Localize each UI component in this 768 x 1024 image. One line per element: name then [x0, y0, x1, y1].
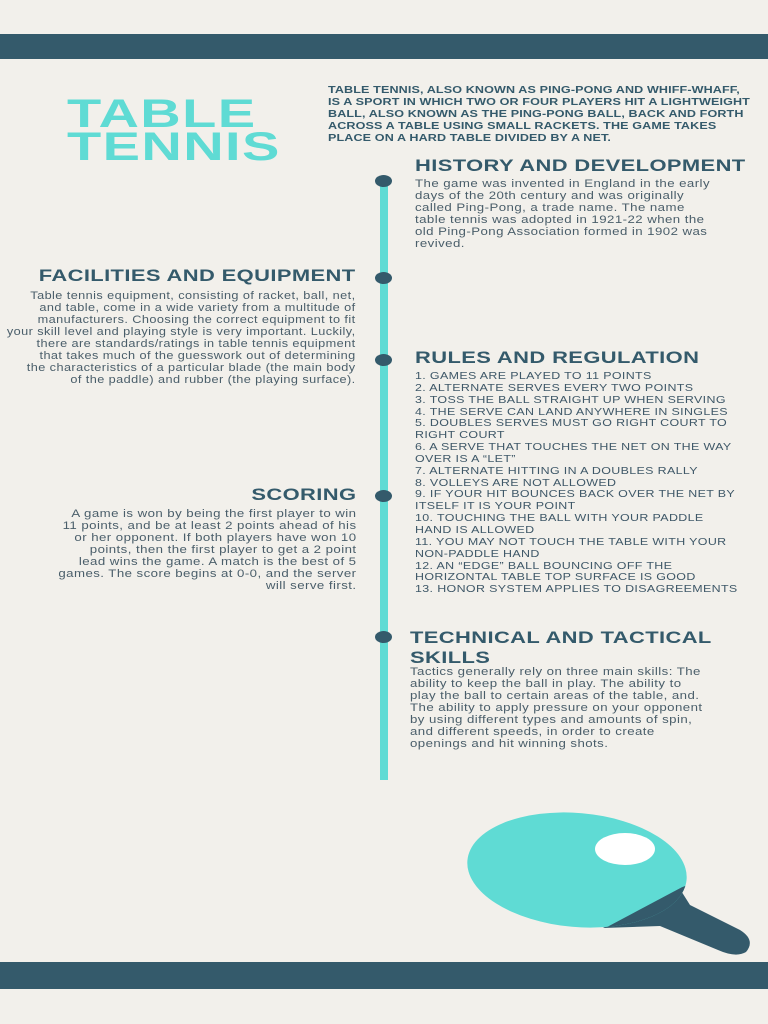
intro text	[328, 85, 750, 144]
facilities text: there are standards/ratings in table tennis equipment	[37, 338, 356, 350]
technical text: The ability to apply pressure on your opponent	[410, 702, 702, 714]
rules list: 6. A SERVE THAT TOUCHES THE NET ON THE WAY	[415, 442, 732, 453]
facilities text: Table tennis equipment, consisting of racket, ball, net,	[31, 290, 356, 302]
rules list: NON-PADDLE HAND	[415, 549, 540, 560]
timeline line	[380, 180, 388, 780]
rules heading: RULES AND REGULATION	[415, 348, 699, 367]
title: TENNIS	[67, 125, 281, 169]
scoring text: A game is won by being the first player to win	[71, 508, 356, 520]
rules list: 4. THE SERVE CAN LAND ANYWHERE IN SINGLES	[415, 407, 728, 418]
facilities text: that takes much of the guesswork out of determining	[40, 350, 356, 362]
facilities text: of the paddle) and rubber (the playing surface).	[71, 374, 356, 386]
title	[67, 92, 281, 169]
technical text: by using different types and amounts of spin,	[410, 714, 692, 726]
rules list: HAND IS ALLOWED	[415, 525, 534, 536]
history text: old Ping-Pong Association formed in 1902 was	[415, 226, 707, 238]
rules list: 12. AN “EDGE” BALL BOUNCING OFF THE	[415, 560, 672, 572]
facilities text: and table, come in a wide variety from a multitude of	[40, 302, 356, 314]
technical heading: TECHNICAL AND TACTICAL	[410, 628, 712, 647]
icon: paddle	[467, 812, 750, 955]
history text: The game was invented in England in the early	[415, 178, 710, 190]
rules list: 2. ALTERNATE SERVES EVERY TWO POINTS	[415, 383, 693, 394]
technical text: play the ball to certain areas of the table, and.	[410, 690, 699, 702]
scoring text: games. The score begins at 0-0, and the server	[58, 568, 356, 580]
history text: called Ping-Pong, a trade name. The name	[415, 202, 685, 214]
history text: revived.	[415, 238, 465, 250]
facilities text: the characteristics of a particular blade (the main body	[27, 362, 356, 374]
history text: table tennis was adopted in 1921-22 when the	[415, 214, 704, 226]
intro text: TABLE TENNIS, ALSO KNOWN AS PING-PONG AND WHIFF-WHAFF,	[328, 85, 740, 96]
intro text: BALL, ALSO KNOWN AS THE PING-PONG BALL, BACK AND FORTH	[328, 109, 744, 120]
intro text: IS A SPORT IN WHICH TWO OR FOUR PLAYERS HIT A LIGHTWEIGHT	[328, 97, 750, 108]
title: TABLE	[67, 92, 257, 136]
rules list: 5. DOUBLES SERVES MUST GO RIGHT COURT TO	[415, 418, 727, 429]
rules list: 8. VOLLEYS ARE NOT ALLOWED	[415, 478, 616, 489]
facilities heading: FACILITIES AND EQUIPMENT	[39, 266, 356, 285]
rules list: OVER IS A “LET”	[415, 454, 516, 465]
scoring text: lead wins the game. A match is the best of 5	[78, 556, 356, 568]
history text	[415, 178, 710, 250]
scoring text: or her opponent. If both players have won 10	[74, 532, 356, 544]
rules list	[415, 371, 738, 595]
history heading: HISTORY AND DEVELOPMENT	[415, 156, 746, 175]
rules list: 9. IF YOUR HIT BOUNCES BACK OVER THE NET BY	[415, 489, 735, 500]
technical heading: SKILLS	[410, 648, 490, 667]
scoring heading: SCORING	[251, 485, 356, 504]
scoring text: will serve first.	[265, 580, 356, 592]
facilities text: your skill level and playing style is very important. Luckily,	[7, 326, 356, 338]
rules list: 10. TOUCHING THE BALL WITH YOUR PADDLE	[415, 513, 704, 524]
rules list: HORIZONTAL TABLE TOP SURFACE IS GOOD	[415, 572, 696, 583]
rules list: 7. ALTERNATE HITTING IN A DOUBLES RALLY	[415, 466, 698, 477]
facilities text: manufacturers. Choosing the correct equipment to fit	[38, 314, 356, 326]
rules list: 11. YOU MAY NOT TOUCH THE TABLE WITH YOUR	[415, 537, 727, 548]
top bar	[0, 34, 768, 59]
scoring text: 11 points, and be at least 2 points ahead of his	[62, 520, 356, 532]
technical text: openings and hit winning shots.	[410, 738, 608, 750]
rules list: ITSELF IT IS YOUR POINT	[415, 501, 576, 512]
technical text: ability to keep the ball in play. The ability to	[410, 678, 682, 690]
scoring text	[58, 508, 356, 592]
technical text	[410, 666, 702, 750]
technical heading	[410, 628, 712, 667]
scoring text: points, then the first player to get a 2 point	[89, 544, 356, 556]
intro text: PLACE ON A HARD TABLE DIVIDED BY A NET.	[328, 133, 611, 144]
history text: days of the 20th century and was originally	[415, 190, 684, 202]
intro text: ACROSS A TABLE USING SMALL RACKETS. THE GAME TAKES	[328, 121, 716, 132]
facilities text	[7, 290, 356, 386]
bottom bar	[0, 962, 768, 989]
rules list: 1. GAMES ARE PLAYED TO 11 POINTS	[415, 371, 652, 382]
technical text: Tactics generally rely on three main skills: The	[410, 666, 701, 678]
rules list: 13. HONOR SYSTEM APPLIES TO DISAGREEMENTS	[415, 584, 738, 595]
technical text: and different speeds, in order to create	[410, 726, 655, 738]
timeline dots	[375, 175, 392, 643]
rules list: RIGHT COURT	[415, 430, 505, 441]
rules list: 3. TOSS THE BALL STRAIGHT UP WHEN SERVING	[415, 395, 726, 406]
